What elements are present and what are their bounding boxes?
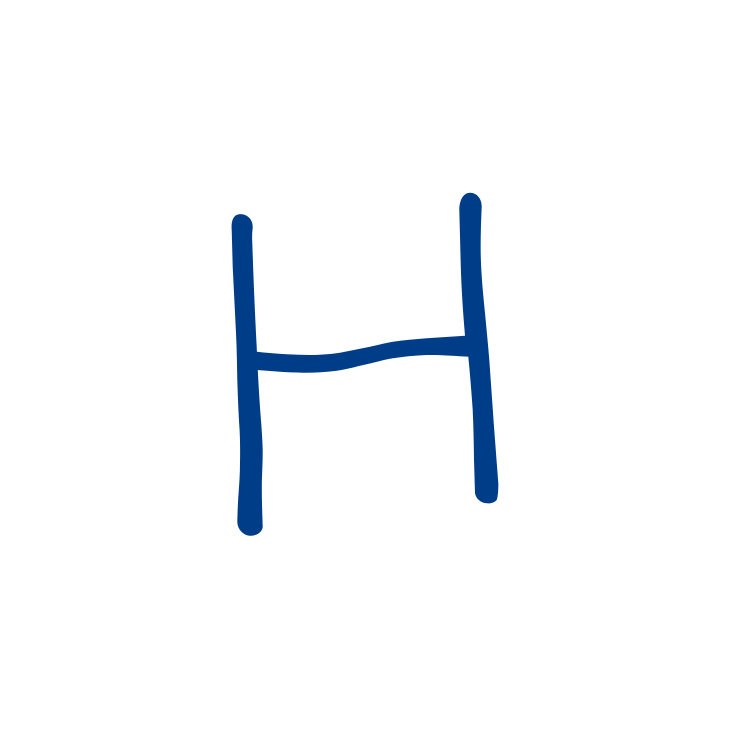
icon: hand-drawn letter H	[232, 193, 498, 536]
right vertical stroke	[459, 193, 498, 503]
left vertical stroke	[232, 214, 263, 536]
crossbar stroke	[256, 336, 470, 373]
